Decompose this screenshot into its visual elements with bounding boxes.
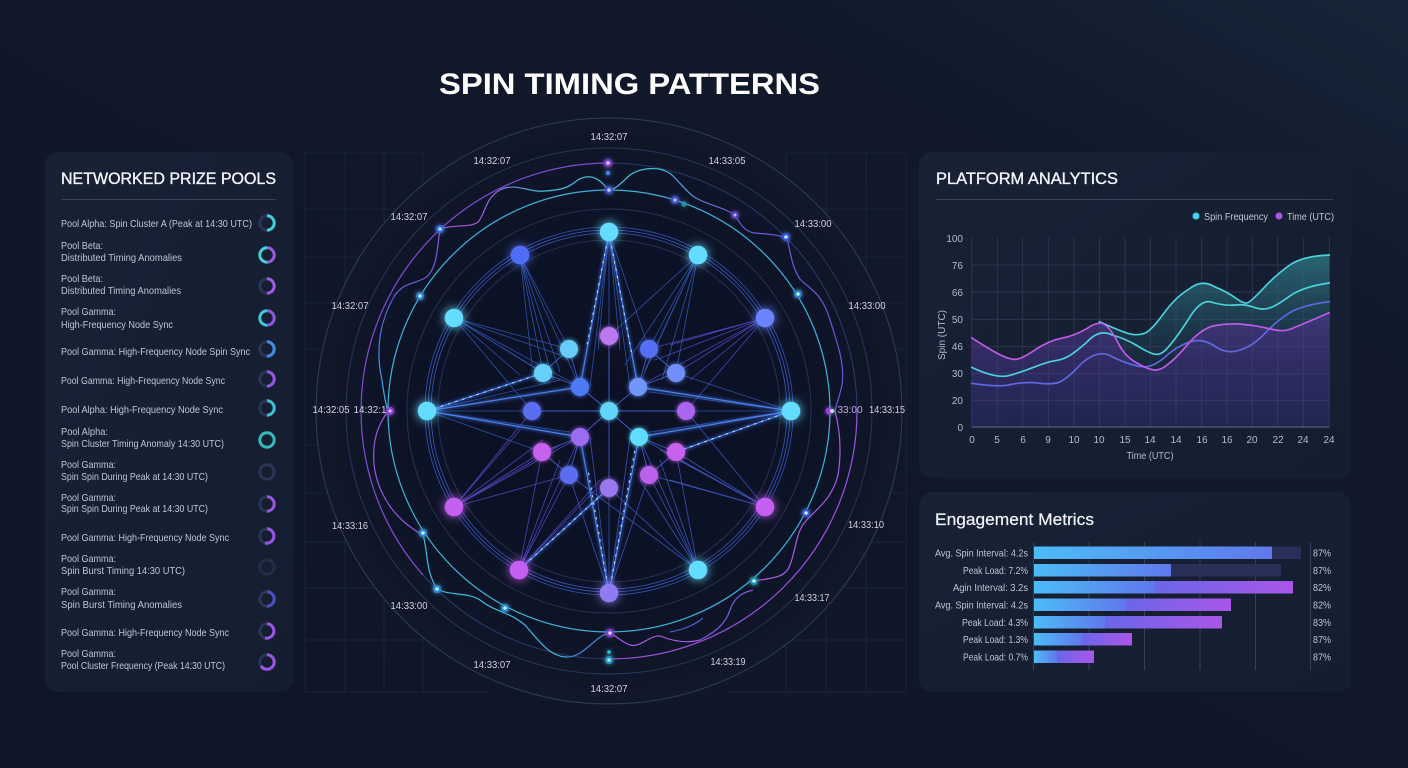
outer network nodes — [418, 223, 800, 602]
x axis labels: 10 — [1093, 435, 1105, 446]
pool list text: Pool Alpha: Spin Cluster A (Peak at 14:30 UTC) — [61, 218, 252, 230]
time labels: 14:33:15 — [869, 404, 905, 416]
y axis title: Spin (UTC) — [937, 310, 948, 360]
chart plot — [972, 237, 1329, 427]
bar 2 — [1034, 564, 1281, 576]
x axis labels: 24 — [1297, 435, 1309, 446]
bar values: 87% — [1313, 652, 1331, 664]
pool list text: Pool Gamma: High-Frequency Node Spin Sync — [61, 346, 250, 358]
y axis labels: 46 — [952, 342, 963, 353]
bar values: 87% — [1313, 565, 1331, 577]
legend: Time (UTC) — [1287, 211, 1334, 223]
time labels: 14:33:16 — [332, 520, 368, 532]
pool list text: Spin Spin During Peak at 14:30 UTC) — [61, 471, 208, 483]
panel: engagement metrics — [919, 492, 1351, 692]
x axis labels: 0 — [969, 435, 975, 446]
time labels — [312, 131, 905, 695]
x axis labels: 22 — [1272, 435, 1284, 446]
central disc — [316, 118, 902, 704]
bar values — [1313, 548, 1331, 664]
time labels: 14:32:07 — [590, 131, 628, 143]
legend — [1192, 211, 1334, 223]
bar values: 83% — [1313, 617, 1331, 629]
time labels: 14:32:05 — [312, 404, 350, 416]
bar 5 — [1034, 616, 1222, 628]
y axis labels: 20 — [952, 396, 963, 407]
bar 4 — [1034, 598, 1231, 611]
pool list text: Pool Gamma: — [61, 648, 116, 660]
time labels: 14:32:07 — [390, 211, 428, 223]
bar labels: Peak Load: 7.2% — [963, 565, 1028, 577]
x axis labels: 24 — [1323, 435, 1335, 446]
x axis labels: 14 — [1144, 435, 1156, 446]
status rings — [260, 216, 274, 669]
time labels: 14:32:07 — [332, 300, 369, 312]
panel: networked prize pools — [45, 152, 293, 692]
pool list text: Spin Burst Timing Anomalies — [61, 599, 182, 611]
x axis labels: 5 — [994, 435, 1000, 446]
pool list text: Pool Gamma: — [61, 459, 116, 471]
pool list text: Pool Beta: — [61, 240, 103, 252]
bar 1 — [1034, 546, 1301, 559]
time labels: 14:33:10 — [848, 519, 884, 531]
time labels: 14:33:00 — [390, 600, 428, 612]
concentric rings — [316, 118, 902, 704]
bar labels: Agin Interval: 3.2s — [953, 582, 1028, 594]
ring marker nodes — [386, 159, 834, 664]
bar labels: Peak Load: 1.3% — [963, 634, 1028, 646]
bar labels: Peak Load: 4.3% — [962, 617, 1028, 629]
heading: networked prize pools: NETWORKED PRIZE POOLS — [61, 170, 276, 188]
pool list text: Pool Alpha: High-Frequency Node Sync — [61, 404, 223, 416]
bar chart — [1034, 542, 1310, 670]
pool list text: Pool Gamma: — [61, 586, 116, 598]
time labels: 14:32:1 — [354, 404, 387, 416]
time labels: 14:32:07 — [590, 683, 628, 695]
x axis title: Time (UTC) — [1126, 451, 1174, 462]
heading: platform analytics: PLATFORM ANALYTICS — [936, 170, 1118, 188]
x axis labels: 14 — [1170, 435, 1182, 446]
bar values: 87% — [1313, 634, 1331, 646]
star network links — [427, 232, 791, 593]
y axis labels: 76 — [952, 261, 963, 272]
line chart — [937, 234, 1335, 462]
y axis labels — [946, 234, 963, 434]
bar values: 87% — [1313, 548, 1331, 560]
panel: platform analytics — [919, 152, 1351, 478]
pool list text: Pool Gamma: High-Frequency Node Sync — [61, 627, 229, 639]
pool list text — [61, 218, 252, 672]
y axis labels: 100 — [946, 234, 963, 245]
pool list text: High-Frequency Node Sync — [61, 319, 173, 331]
bar 7 — [1034, 650, 1094, 663]
time labels: 14:32:07 — [474, 155, 511, 167]
pool list text: Spin Burst Timing 14:30 UTC) — [61, 565, 185, 577]
bar 6 — [1034, 633, 1132, 646]
x axis labels: 15 — [1119, 435, 1131, 446]
pool list text: Pool Cluster Frequency (Peak 14:30 UTC) — [61, 660, 225, 672]
x axis labels — [969, 435, 1335, 446]
x axis labels: 20 — [1246, 435, 1258, 446]
pool list text: Pool Beta: — [61, 273, 103, 285]
pool list text: Spin Cluster Timing Anomaly 14:30 UTC) — [61, 438, 224, 450]
heading: engagement metrics: Engagement Metrics — [935, 511, 1094, 529]
y axis labels: 50 — [952, 315, 963, 326]
time labels: 14:33:00 — [794, 218, 832, 230]
bar values: 82% — [1313, 600, 1331, 612]
y axis labels: 66 — [952, 288, 963, 299]
x axis labels: 6 — [1020, 435, 1026, 446]
pool list text: Pool Gamma: High-Frequency Node Sync — [61, 532, 229, 544]
backdrop grid — [305, 153, 906, 692]
time labels: 14:33:00 — [848, 300, 886, 312]
bar labels — [935, 548, 1028, 664]
bar labels: Avg. Spin Interval: 4.2s — [935, 548, 1028, 560]
y axis labels: 0 — [957, 423, 963, 434]
legend: Spin Frequency — [1204, 211, 1269, 223]
pool list text: Pool Gamma: — [61, 306, 116, 318]
pool list text: Spin Spin During Peak at 14:30 UTC) — [61, 503, 208, 515]
bar 3 — [1034, 581, 1293, 594]
time labels: 14:33:05 — [708, 155, 746, 167]
time labels: 33:00 — [838, 404, 863, 416]
bar values: 82% — [1313, 582, 1331, 594]
time labels: 14:33:17 — [794, 592, 830, 604]
bar labels: Peak Load: 0.7% — [963, 652, 1028, 664]
inner network nodes — [523, 327, 695, 497]
bar labels: Avg. Spin Interval: 4.2s — [935, 600, 1028, 612]
title: SPIN TIMING PATTERNS — [439, 68, 820, 101]
pool list text: Distributed Timing Anomalies — [61, 252, 182, 264]
pool list text: Distributed Timing Anomalies — [61, 285, 181, 297]
x axis labels: 16 — [1221, 435, 1233, 446]
radial timing diagram — [305, 118, 906, 704]
x axis labels: 10 — [1068, 435, 1080, 446]
time labels: 14:33:19 — [710, 656, 746, 668]
pool list text: Pool Gamma: — [61, 492, 116, 504]
x axis labels: 16 — [1196, 435, 1208, 446]
wavy signal traces — [374, 169, 843, 657]
y axis labels: 30 — [952, 369, 963, 380]
pool list text: Pool Gamma: — [61, 553, 116, 565]
pool list text: Pool Alpha: — [61, 426, 108, 438]
x axis labels: 9 — [1045, 435, 1051, 446]
pool list text: Pool Gamma: High-Frequency Node Sync — [61, 375, 225, 387]
time labels: 14:33:07 — [474, 659, 511, 671]
